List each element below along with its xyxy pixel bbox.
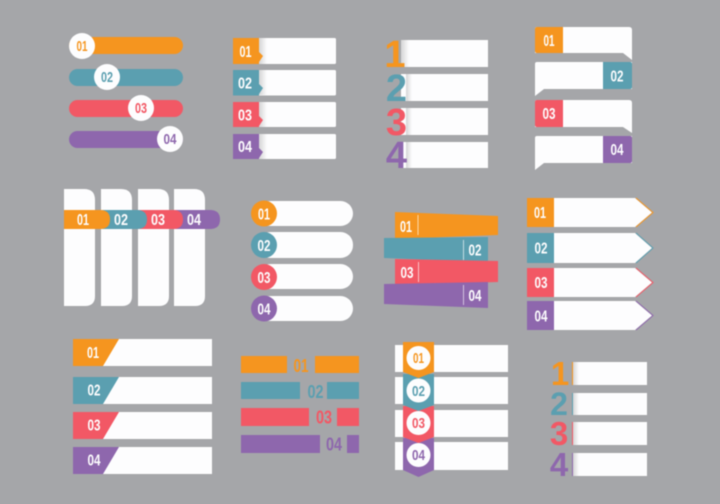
band 02 [100, 210, 147, 229]
row 04: 04 [164, 132, 176, 148]
row 03: 03 [135, 101, 147, 117]
row 2: 2 [550, 386, 568, 422]
panel: arrow cards [527, 198, 653, 330]
row 02 [535, 62, 632, 96]
band 01 [64, 210, 110, 229]
column 2 [101, 189, 132, 306]
ribbon 02: 02 [412, 384, 425, 400]
row 02: 02 [238, 76, 252, 92]
row 2: 2 [386, 68, 407, 110]
row 04: 04 [610, 142, 624, 159]
row 03: 03 [88, 418, 101, 434]
row 01: 01 [294, 355, 308, 376]
row 4 [386, 135, 488, 177]
ribbon 01: 01 [413, 351, 424, 367]
column 4 [174, 189, 205, 306]
row 02: 02 [88, 382, 101, 400]
column 1 [64, 189, 95, 306]
row 01: 01 [87, 345, 99, 362]
row 04 [535, 136, 632, 170]
row 04: 04 [326, 434, 343, 454]
row 03: 03 [542, 106, 556, 123]
row 02: 02 [534, 240, 548, 258]
row 1: 1 [384, 34, 406, 76]
row 01: 01 [240, 44, 252, 61]
row 2 [386, 68, 488, 110]
row 4: 4 [386, 135, 407, 177]
row 03: 03 [258, 270, 271, 287]
ribbon 04: 04 [468, 288, 482, 305]
band 04: 04 [187, 212, 201, 229]
panel: big numerals strips [384, 34, 488, 177]
band 02: 02 [114, 212, 128, 229]
row 1: 1 [551, 355, 569, 392]
ribbon 04: 04 [412, 448, 425, 464]
row 02: 02 [258, 238, 271, 255]
band 04 [170, 210, 220, 229]
row 01: 01 [544, 33, 555, 50]
row 04: 04 [534, 308, 548, 326]
row 03: 03 [316, 406, 332, 428]
panel: tabbed cards [233, 38, 336, 159]
panel: ribbon chain with badges [395, 342, 508, 477]
row 3 [386, 102, 488, 144]
row 01: 01 [76, 39, 88, 55]
row 04: 04 [88, 452, 101, 470]
panel: rounded pills with circles [251, 200, 353, 322]
row 3: 3 [550, 415, 568, 452]
panel: speech bubbles [535, 27, 632, 170]
row 4: 4 [550, 446, 569, 483]
row 01: 01 [258, 206, 270, 224]
panel: pill sliders [69, 33, 183, 152]
row 02: 02 [101, 70, 113, 86]
band 01: 01 [77, 212, 89, 229]
row 04: 04 [238, 139, 252, 156]
ribbon 02: 02 [468, 242, 482, 260]
row 04: 04 [258, 302, 271, 318]
row 01: 01 [534, 205, 546, 222]
row 1 [384, 34, 488, 76]
band 03: 03 [151, 212, 165, 229]
row 03: 03 [534, 275, 548, 292]
band 03 [135, 210, 183, 229]
white strip 4 [395, 442, 508, 470]
panel: diagonal cut cards [73, 339, 212, 474]
panel: split bars with numbers [241, 355, 359, 454]
ribbon 03: 03 [412, 416, 425, 432]
row 01 [535, 27, 632, 60]
white strip 1 [395, 345, 508, 372]
panel: vertical columns with band [64, 189, 220, 306]
row 03 [535, 100, 632, 133]
row 3: 3 [386, 102, 407, 144]
row 02: 02 [308, 381, 324, 402]
column 3 [138, 189, 169, 306]
white strip 2 [395, 377, 508, 404]
ribbon 03: 03 [400, 265, 414, 282]
row 03: 03 [238, 108, 252, 124]
panel: small numerals strips [550, 355, 647, 483]
white strip 3 [395, 410, 508, 437]
row 02: 02 [610, 68, 624, 86]
ribbon 01: 01 [400, 219, 412, 236]
panel: slanted ribbons [384, 212, 498, 308]
